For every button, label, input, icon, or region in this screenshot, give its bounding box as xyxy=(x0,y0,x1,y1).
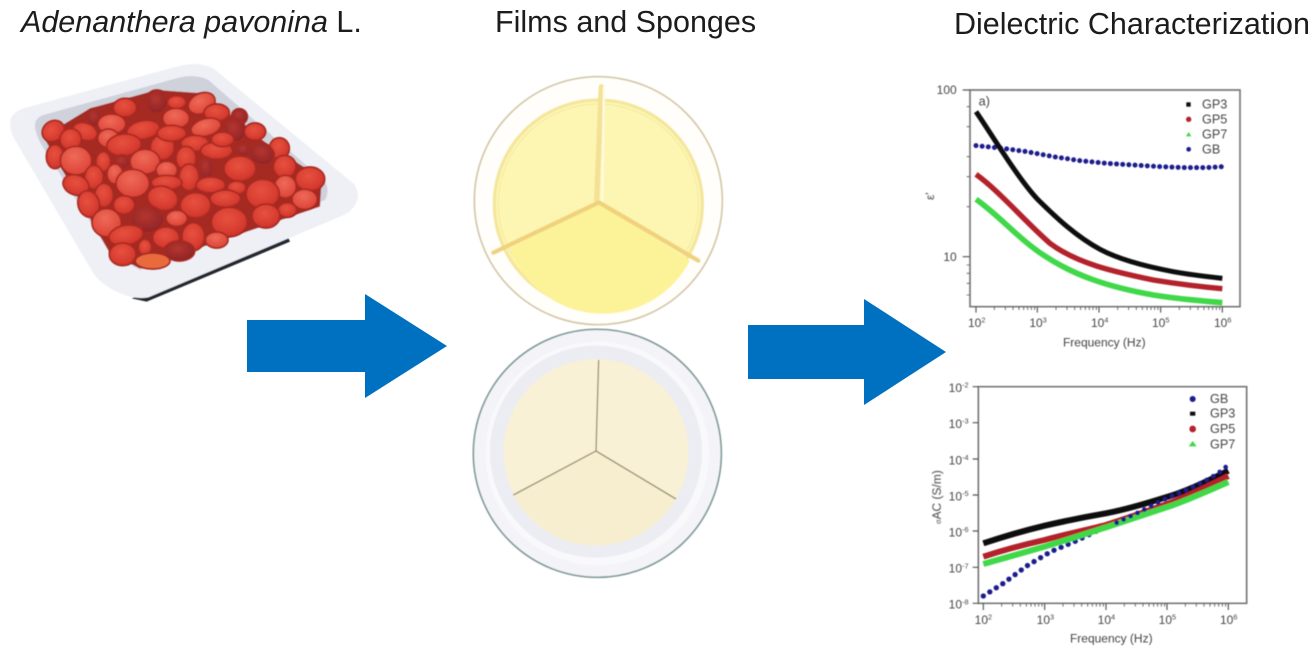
curve GP7 xyxy=(976,199,1222,303)
legend: GP5 xyxy=(1202,112,1227,126)
x axis labels: 2 xyxy=(988,613,992,622)
legend: GP3 xyxy=(1202,97,1227,111)
legend: GP7 xyxy=(1210,437,1235,451)
chart: dielectric permittivity vs frequency: 6 xyxy=(1227,316,1231,325)
chart: AC conductivity vs frequency: 10 xyxy=(1159,613,1172,627)
y axis labels: -2 xyxy=(962,381,969,390)
x axis labels: 10 xyxy=(968,316,981,330)
chart: dielectric permittivity vs frequency: a) xyxy=(979,94,990,108)
x axis labels: 10 xyxy=(975,613,988,627)
sponge cuts xyxy=(513,360,676,499)
plot frame xyxy=(978,387,1247,603)
chart: AC conductivity vs frequency: 10 xyxy=(949,598,962,612)
chart: AC conductivity vs frequency: -7 xyxy=(962,561,969,570)
arrow: seeds to films xyxy=(247,294,447,398)
chart: dielectric permittivity vs frequency: 10 xyxy=(943,250,957,264)
chart: AC conductivity vs frequency: -5 xyxy=(962,489,969,498)
curve GP3 xyxy=(976,112,1222,278)
curve GB xyxy=(976,146,1222,168)
legend: GP5 xyxy=(1210,422,1235,436)
legend: GP3 xyxy=(1210,407,1235,421)
legend xyxy=(1189,392,1235,451)
curve GP5 xyxy=(983,476,1228,557)
chart: dielectric permittivity vs frequency: 3 xyxy=(1043,316,1047,325)
chart: dielectric permittivity vs frequency: 5 xyxy=(1165,316,1169,325)
chart: dielectric permittivity vs frequency: 4 xyxy=(1104,316,1108,325)
y axis labels: 10 xyxy=(949,381,962,395)
photo: sponge petri dish xyxy=(473,329,721,577)
chart: AC conductivity vs frequency: 4 xyxy=(1111,613,1115,622)
chart: dielectric permittivity vs frequency: 10 xyxy=(1152,316,1165,330)
curve GP3 xyxy=(983,471,1228,543)
curve GB upper part xyxy=(1117,465,1228,523)
curve GP5 xyxy=(976,174,1222,289)
x axis labels: 2 xyxy=(981,316,985,325)
chart: AC conductivity vs frequency: 10 xyxy=(949,453,962,467)
curve GB lower part xyxy=(983,529,1100,596)
chart: AC conductivity vs frequency: -6 xyxy=(962,525,969,534)
chart: AC conductivity vs frequency: Frequency (Hz) xyxy=(1070,631,1153,645)
axis ticks xyxy=(973,387,1228,610)
legend: GP7 xyxy=(1202,127,1227,141)
chart: dielectric permittivity vs frequency: 10 xyxy=(1029,316,1043,330)
axis ticks xyxy=(963,90,1222,313)
legend xyxy=(1186,97,1227,156)
heading: Films and Sponges: Films and Sponges xyxy=(495,5,756,39)
chart: AC conductivity vs frequency xyxy=(930,381,1247,645)
heading: Adenanthera pavonina L.: Adenanthera pavonina L. xyxy=(19,5,362,39)
chart: AC conductivity vs frequency: 6 xyxy=(1233,613,1237,622)
seeds xyxy=(38,88,325,269)
legend: GB xyxy=(1202,142,1220,156)
chart: dielectric permittivity vs frequency: Frequency (Hz) xyxy=(1063,335,1146,349)
legend: GB xyxy=(1210,392,1228,406)
chart: AC conductivity vs frequency: 10 xyxy=(949,562,962,576)
chart: dielectric permittivity vs frequency xyxy=(923,83,1240,349)
chart: AC conductivity vs frequency: 10 xyxy=(949,489,962,503)
curve GP7 xyxy=(983,482,1228,564)
arrow: films to characterization xyxy=(748,299,946,405)
chart: AC conductivity vs frequency: σAC (S/m) xyxy=(930,470,944,524)
heading: Dielectric Characterization: Dielectric Characterization xyxy=(954,7,1310,41)
chart: AC conductivity vs frequency: -8 xyxy=(962,597,969,606)
chart: AC conductivity vs frequency: 10 xyxy=(1037,613,1050,627)
chart: AC conductivity vs frequency: 5 xyxy=(1172,613,1176,622)
chart: AC conductivity vs frequency: 10 xyxy=(1220,613,1233,627)
y axis labels: 100 xyxy=(937,83,957,97)
chart: AC conductivity vs frequency: 3 xyxy=(1050,613,1054,622)
chart: AC conductivity vs frequency: -3 xyxy=(962,417,969,426)
photo: film petri dish xyxy=(474,77,722,325)
chart: dielectric permittivity vs frequency: 10 xyxy=(1214,316,1227,330)
chart: AC conductivity vs frequency: 10 xyxy=(949,417,962,431)
chart: AC conductivity vs frequency: 10 xyxy=(949,525,962,539)
chart: AC conductivity vs frequency: -4 xyxy=(962,453,969,462)
chart: dielectric permittivity vs frequency: ε' xyxy=(923,192,937,200)
photo: tray of red seeds xyxy=(10,64,358,302)
plot frame xyxy=(970,90,1240,307)
chart: dielectric permittivity vs frequency: 10 xyxy=(1091,316,1104,330)
chart: AC conductivity vs frequency: 10 xyxy=(1098,613,1111,627)
film dividers xyxy=(493,87,698,261)
